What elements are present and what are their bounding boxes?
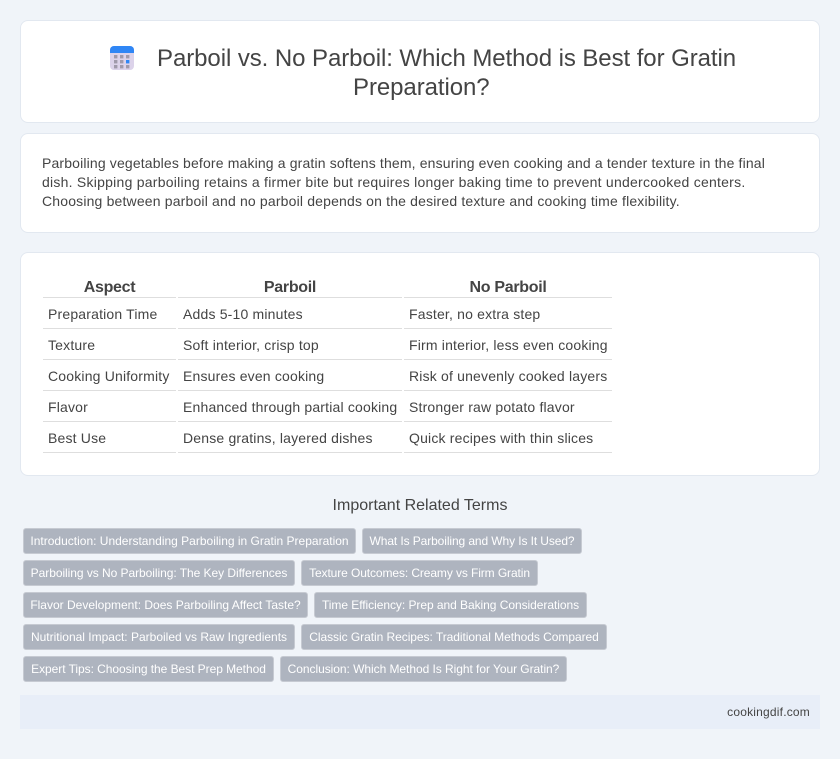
row: texture: Soft interior, crisp top — [183, 337, 319, 353]
tag — [23, 624, 295, 650]
tag: Nutritional Impact: Parboiled vs Raw Ingredients — [31, 630, 287, 644]
row: preparation time: Preparation Time — [48, 306, 158, 322]
tag: Conclusion: Which Method Is Right for Your Gratin? — [288, 662, 559, 676]
panel: introduction — [20, 133, 820, 233]
tag: Classic Gratin Recipes: Traditional Methods Compared — [309, 630, 599, 644]
row: cooking uniformity: Cooking Uniformity — [48, 368, 170, 384]
panel: comparison table — [20, 252, 820, 476]
tag — [301, 624, 607, 650]
row: best use: Quick recipes with thin slices — [409, 430, 593, 446]
intro text: dish. Skipping parboiling retains a firmer bite but requires longer baking time to prevent undercooked centers. — [42, 174, 745, 190]
row: preparation time — [48, 306, 540, 322]
tag: Introduction: Understanding Parboiling in Gratin Preparation — [30, 534, 349, 548]
tag: Parboiling vs No Parboiling: The Key Differences — [31, 566, 287, 580]
row: preparation time: Adds 5-10 minutes — [183, 306, 303, 322]
row: texture: Firm interior, less even cooking — [409, 337, 608, 353]
tag: Flavor Development: Does Parboiling Affect Taste? — [30, 598, 301, 612]
row: flavor: Stronger raw potato flavor — [409, 399, 575, 415]
tag — [23, 592, 308, 618]
title: Parboil vs. No Parboil: Which Method is Best for Gratin — [157, 45, 736, 72]
row: cooking uniformity — [48, 368, 607, 384]
tag — [362, 528, 582, 554]
tag — [301, 560, 538, 586]
row: cooking uniformity: Ensures even cooking — [183, 368, 324, 384]
intro text: Choosing between parboil and no parboil depends on the desired texture and cooking time flexibility. — [42, 193, 680, 209]
tag: What Is Parboiling and Why Is It Used? — [370, 534, 574, 548]
row: flavor: Flavor — [48, 399, 88, 415]
title — [157, 45, 736, 101]
panel: title card — [20, 20, 820, 123]
footer: cookingdif.com — [727, 705, 810, 719]
footer — [20, 695, 820, 729]
row: best use: Dense gratins, layered dishes — [183, 430, 373, 446]
intro text: Parboiling vegetables before making a gratin softens them, ensuring even cooking and a tender texture in the final — [42, 155, 765, 171]
table header: Parboil — [264, 279, 316, 296]
row: best use — [48, 430, 593, 446]
tag — [280, 656, 567, 682]
tag: Texture Outcomes: Creamy vs Firm Gratin — [309, 566, 530, 580]
heading: related terms: Important Related Terms — [333, 497, 507, 514]
title: Preparation? — [353, 74, 490, 101]
row: texture — [48, 337, 608, 353]
row: cooking uniformity: Risk of unevenly cooked layers — [409, 368, 607, 384]
row: flavor — [48, 399, 575, 415]
table header — [84, 279, 546, 296]
tag — [23, 528, 356, 554]
table header: No Parboil — [469, 279, 546, 296]
tag — [23, 560, 295, 586]
intro text — [42, 155, 765, 209]
tag list: related terms — [23, 528, 607, 682]
table header: Aspect — [84, 279, 135, 296]
row: preparation time: Faster, no extra step — [409, 306, 540, 322]
icon: calendar — [110, 46, 134, 70]
row: best use: Best Use — [48, 430, 106, 446]
tag — [314, 592, 587, 618]
row: texture: Texture — [48, 337, 95, 353]
row: flavor: Enhanced through partial cooking — [183, 399, 397, 415]
tag: Time Efficiency: Prep and Baking Considerations — [322, 598, 579, 612]
tag: Expert Tips: Choosing the Best Prep Method — [31, 662, 266, 676]
tag — [23, 656, 274, 682]
